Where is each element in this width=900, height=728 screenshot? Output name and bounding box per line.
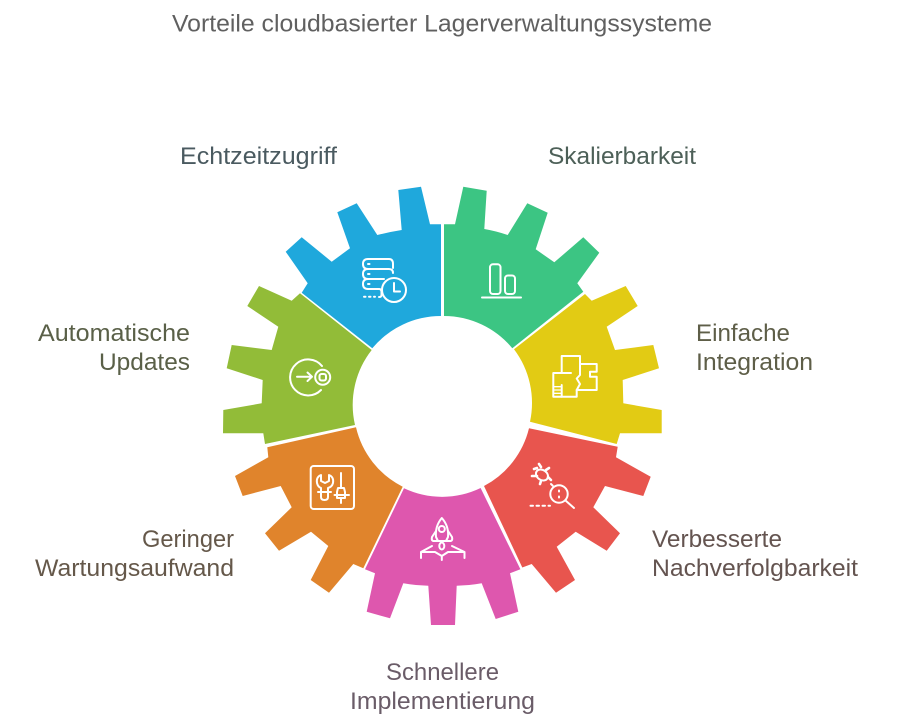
gear segment: Geringer Wartungsaufwand [235, 427, 403, 593]
label: Automatische Updates: Automatische [38, 320, 190, 347]
segment shape [444, 187, 599, 348]
label: Einfache Integration: Einfache [696, 320, 790, 347]
icon: rocket [421, 518, 464, 560]
gear segment: Schnellere Implementierung [365, 488, 520, 625]
icon: tools in box [311, 466, 354, 509]
label: Automatische Updates [38, 320, 190, 376]
label: Schnellere Implementierung [350, 659, 535, 715]
label: Echtzeitzugriff: Echtzeitzugriff [180, 143, 337, 170]
gear segment: Verbesserte Nachverfolgbarkeit [484, 428, 651, 593]
segment shape [223, 286, 372, 444]
label: Verbesserte Nachverfolgbarkeit [652, 526, 858, 582]
gear segment: Echtzeitzugriff [286, 187, 441, 348]
segment shape [365, 488, 520, 625]
icon: bar chart [482, 264, 521, 298]
icon: bug and magnifier [530, 464, 574, 508]
label: Schnellere Implementierung: Schnellere [386, 659, 499, 686]
gear segment: Einfache Integration [514, 286, 662, 444]
label: Automatische Updates: Updates [99, 349, 190, 376]
label: Einfache Integration: Integration [696, 349, 813, 376]
label: Geringer Wartungsaufwand: Geringer [142, 526, 234, 553]
segment shape [286, 187, 441, 348]
icon: server with clock [363, 259, 406, 302]
label: Schnellere Implementierung: Implementierung [350, 688, 535, 715]
segment shape [235, 427, 403, 593]
gear segment: Automatische Updates [223, 286, 372, 444]
label: Geringer Wartungsaufwand [35, 526, 234, 582]
label: Verbesserte Nachverfolgbarkeit: Nachverfolgbarkeit [652, 555, 858, 582]
segment shape [514, 286, 662, 444]
segment shape [484, 428, 651, 593]
label: Einfache Integration [696, 320, 813, 376]
label: Skalierbarkeit: Skalierbarkeit [548, 143, 696, 170]
icon: puzzle pieces [553, 356, 597, 397]
gear segment: Skalierbarkeit [444, 187, 599, 348]
label: Geringer Wartungsaufwand: Wartungsaufwand [35, 555, 234, 582]
label: Verbesserte Nachverfolgbarkeit: Verbesserte [652, 526, 782, 553]
title: Vorteile cloudbasierter Lagerverwaltungssysteme [172, 10, 712, 38]
icon: arrow into circle [290, 359, 330, 395]
